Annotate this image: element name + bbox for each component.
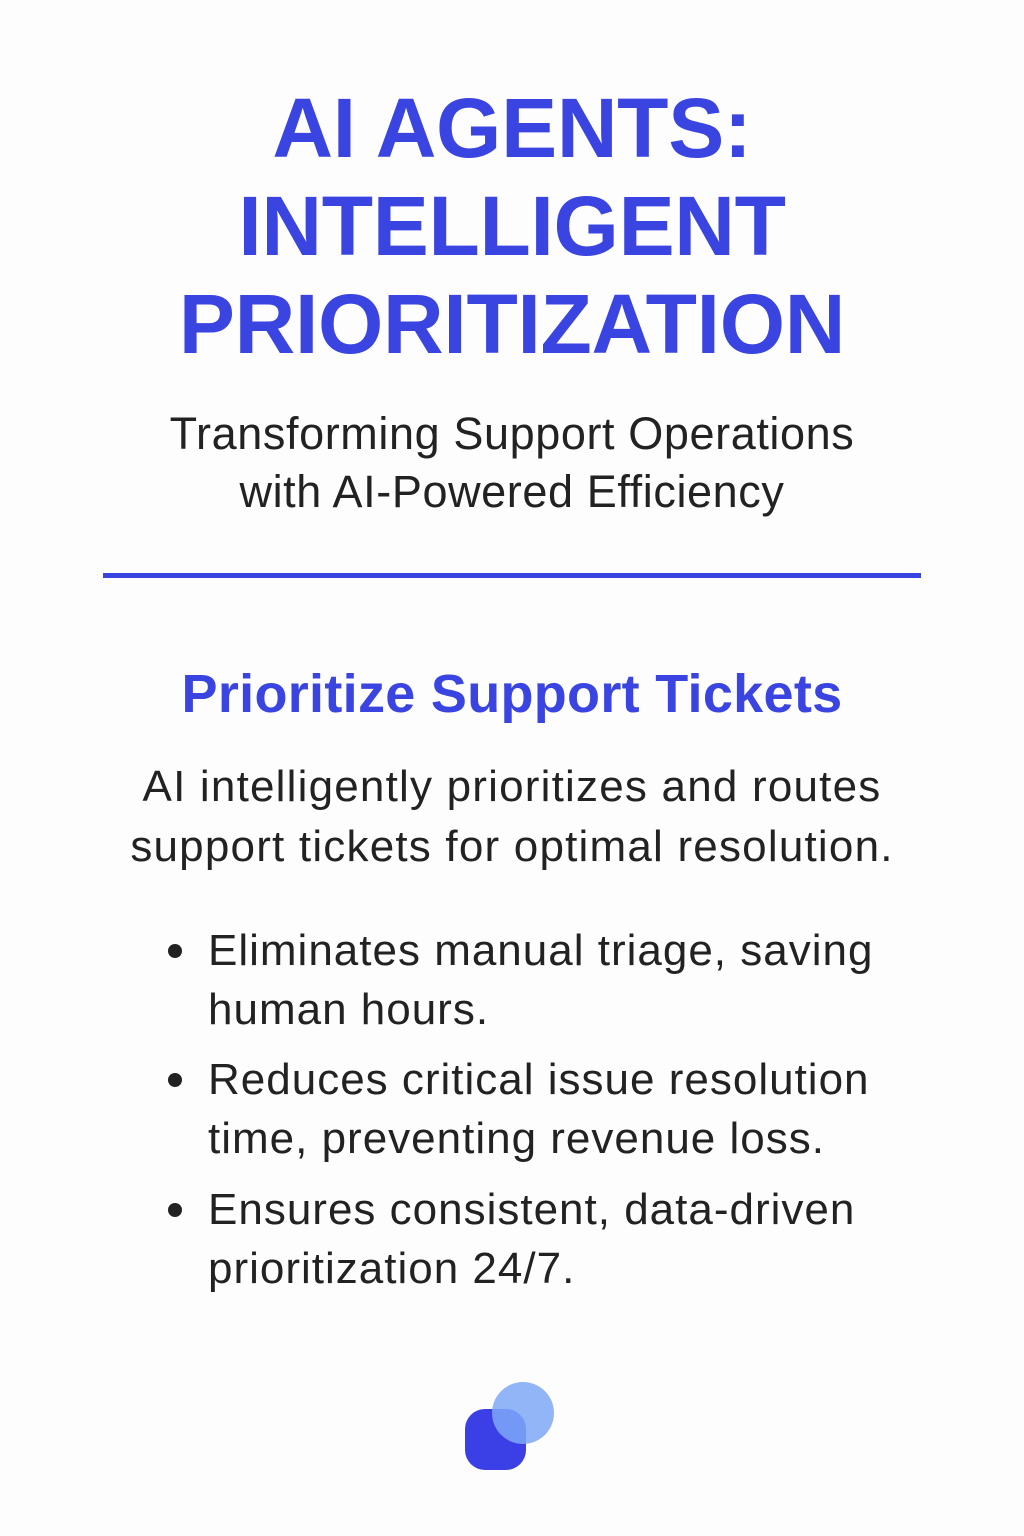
subtitle [170, 408, 854, 517]
bullet 1 [168, 926, 873, 1034]
description: support tickets for optimal resolution. [130, 822, 894, 871]
divider [103, 573, 921, 578]
bullet 1: human hours. [208, 985, 489, 1034]
bullet 3: Ensures consistent, data-driven [208, 1185, 855, 1234]
title [179, 81, 845, 371]
bullet 2: time, preventing revenue loss. [208, 1114, 825, 1163]
bullet 3: prioritization 24/7. [208, 1244, 575, 1293]
subtitle: with AI-Powered Efficiency [239, 466, 784, 517]
bullet 2: Reduces critical issue resolution [208, 1055, 870, 1104]
bullet 3 [168, 1185, 855, 1293]
bullet list [168, 926, 873, 1293]
icon: logo [465, 1382, 554, 1470]
section heading: Prioritize Support Tickets [182, 664, 842, 724]
description: AI intelligently prioritizes and routes [143, 762, 881, 811]
bullet 2 [168, 1055, 870, 1163]
subtitle: Transforming Support Operations [170, 408, 854, 459]
bullet 1: Eliminates manual triage, saving [208, 926, 873, 975]
description [130, 762, 894, 871]
title: AI AGENTS: [272, 81, 752, 175]
title: PRIORITIZATION [179, 277, 845, 371]
title: INTELLIGENT [238, 179, 786, 273]
